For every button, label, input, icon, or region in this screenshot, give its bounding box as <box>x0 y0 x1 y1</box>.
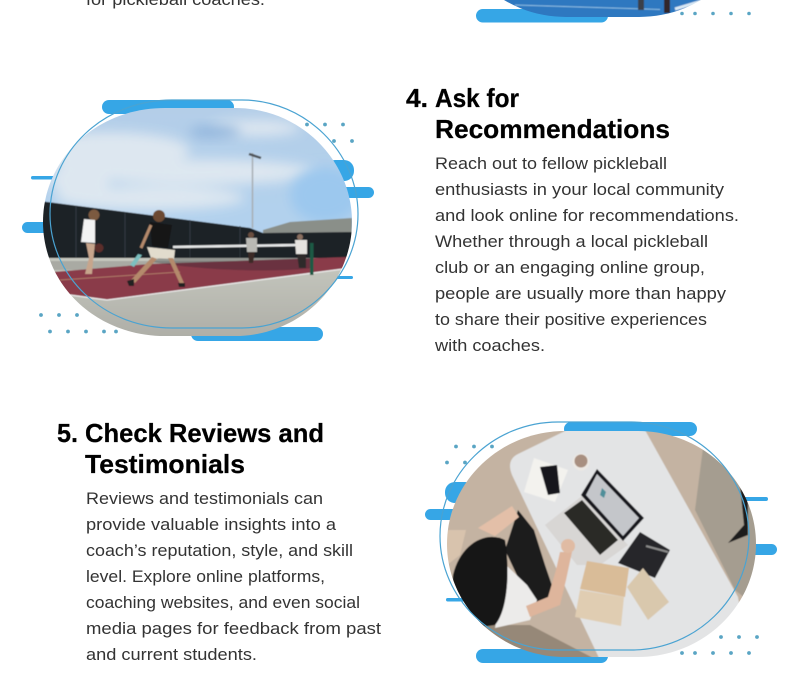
table <box>510 430 742 660</box>
black notebook <box>618 532 670 578</box>
text block: step 4 body: and look online for recommendations. <box>435 206 739 225</box>
beige box <box>627 568 669 620</box>
ground <box>40 258 355 338</box>
laptop <box>545 496 628 565</box>
text block: step 5 body: coaching websites, and even social <box>86 593 360 612</box>
red court <box>53 257 347 300</box>
outline: step 5 <box>440 422 749 650</box>
heading: step 5: Check Reviews and <box>85 418 324 448</box>
text block: step 4 body: Reach out to fellow pickleball <box>435 154 667 173</box>
pills: step 5 decoration <box>425 422 777 663</box>
open book <box>580 561 629 597</box>
player 1 <box>81 210 104 274</box>
photo: woman at a desk with laptop and books <box>445 428 760 660</box>
dots: step 4 top right <box>305 123 354 143</box>
text block: step 4 body: with coaches. <box>434 336 545 355</box>
text block: step 5 body: media pages for feedback from past <box>86 619 381 638</box>
text block: step 5 body: coach’s reputation, style, and skill <box>86 541 353 560</box>
decor: section 3 image remnant <box>476 0 751 22</box>
heading: step 4: Ask for <box>435 83 519 113</box>
dots: step 4 bottom left <box>39 313 118 333</box>
text block: step 4 body: Whether through a local pickleball <box>435 232 708 251</box>
woman <box>505 510 557 603</box>
player 4 <box>295 234 307 268</box>
heading: step 5: Testimonials <box>85 449 245 479</box>
coffee cup <box>574 460 588 470</box>
text block: step 5 body: provide valuable insights into a <box>86 515 337 534</box>
player 3 <box>246 232 257 263</box>
photo: players on a pickleball court <box>30 105 360 338</box>
text block: step 4 body: to share their positive experiences <box>435 310 707 329</box>
photo: section 3 blue court <box>504 0 701 17</box>
text block: step 5 body: and current students. <box>86 645 257 664</box>
text block: step 4 body: people are usually more than happy <box>435 284 727 303</box>
text block: step 5 body: Reviews and testimonials can <box>86 489 323 508</box>
heading: step 4: 4. <box>406 83 428 113</box>
dots: step 5 top left <box>445 445 494 464</box>
dots: step 5 bottom right <box>680 635 759 655</box>
pills: step 4 decoration <box>22 100 374 341</box>
pill: section 3 bottom <box>476 9 608 22</box>
heading: step 5: 5. <box>57 418 78 448</box>
text block: step 5 body <box>86 489 381 664</box>
heading: step 4: Recommendations <box>435 114 670 144</box>
image group: step 5 desk <box>425 422 777 663</box>
text block: step 4 body: club or an engaging online group, <box>435 258 705 277</box>
building <box>263 218 352 236</box>
heading: step 5 <box>57 418 324 479</box>
player 2 <box>127 210 185 287</box>
image group: step 4 pickleball court <box>22 100 374 341</box>
text block: step 4 body <box>434 154 739 355</box>
notebook and phone <box>524 458 568 502</box>
fence <box>40 201 355 262</box>
outline: step 4 <box>50 100 358 328</box>
heading: step 4 <box>406 83 670 144</box>
dots: section 3 <box>680 12 751 15</box>
net <box>173 245 297 247</box>
rug <box>695 450 756 596</box>
text block: step 4 body: enthusiasts in your local community <box>435 180 725 199</box>
light pole <box>252 153 254 228</box>
text block: step 5 body: level. Explore online platforms, <box>86 567 325 586</box>
